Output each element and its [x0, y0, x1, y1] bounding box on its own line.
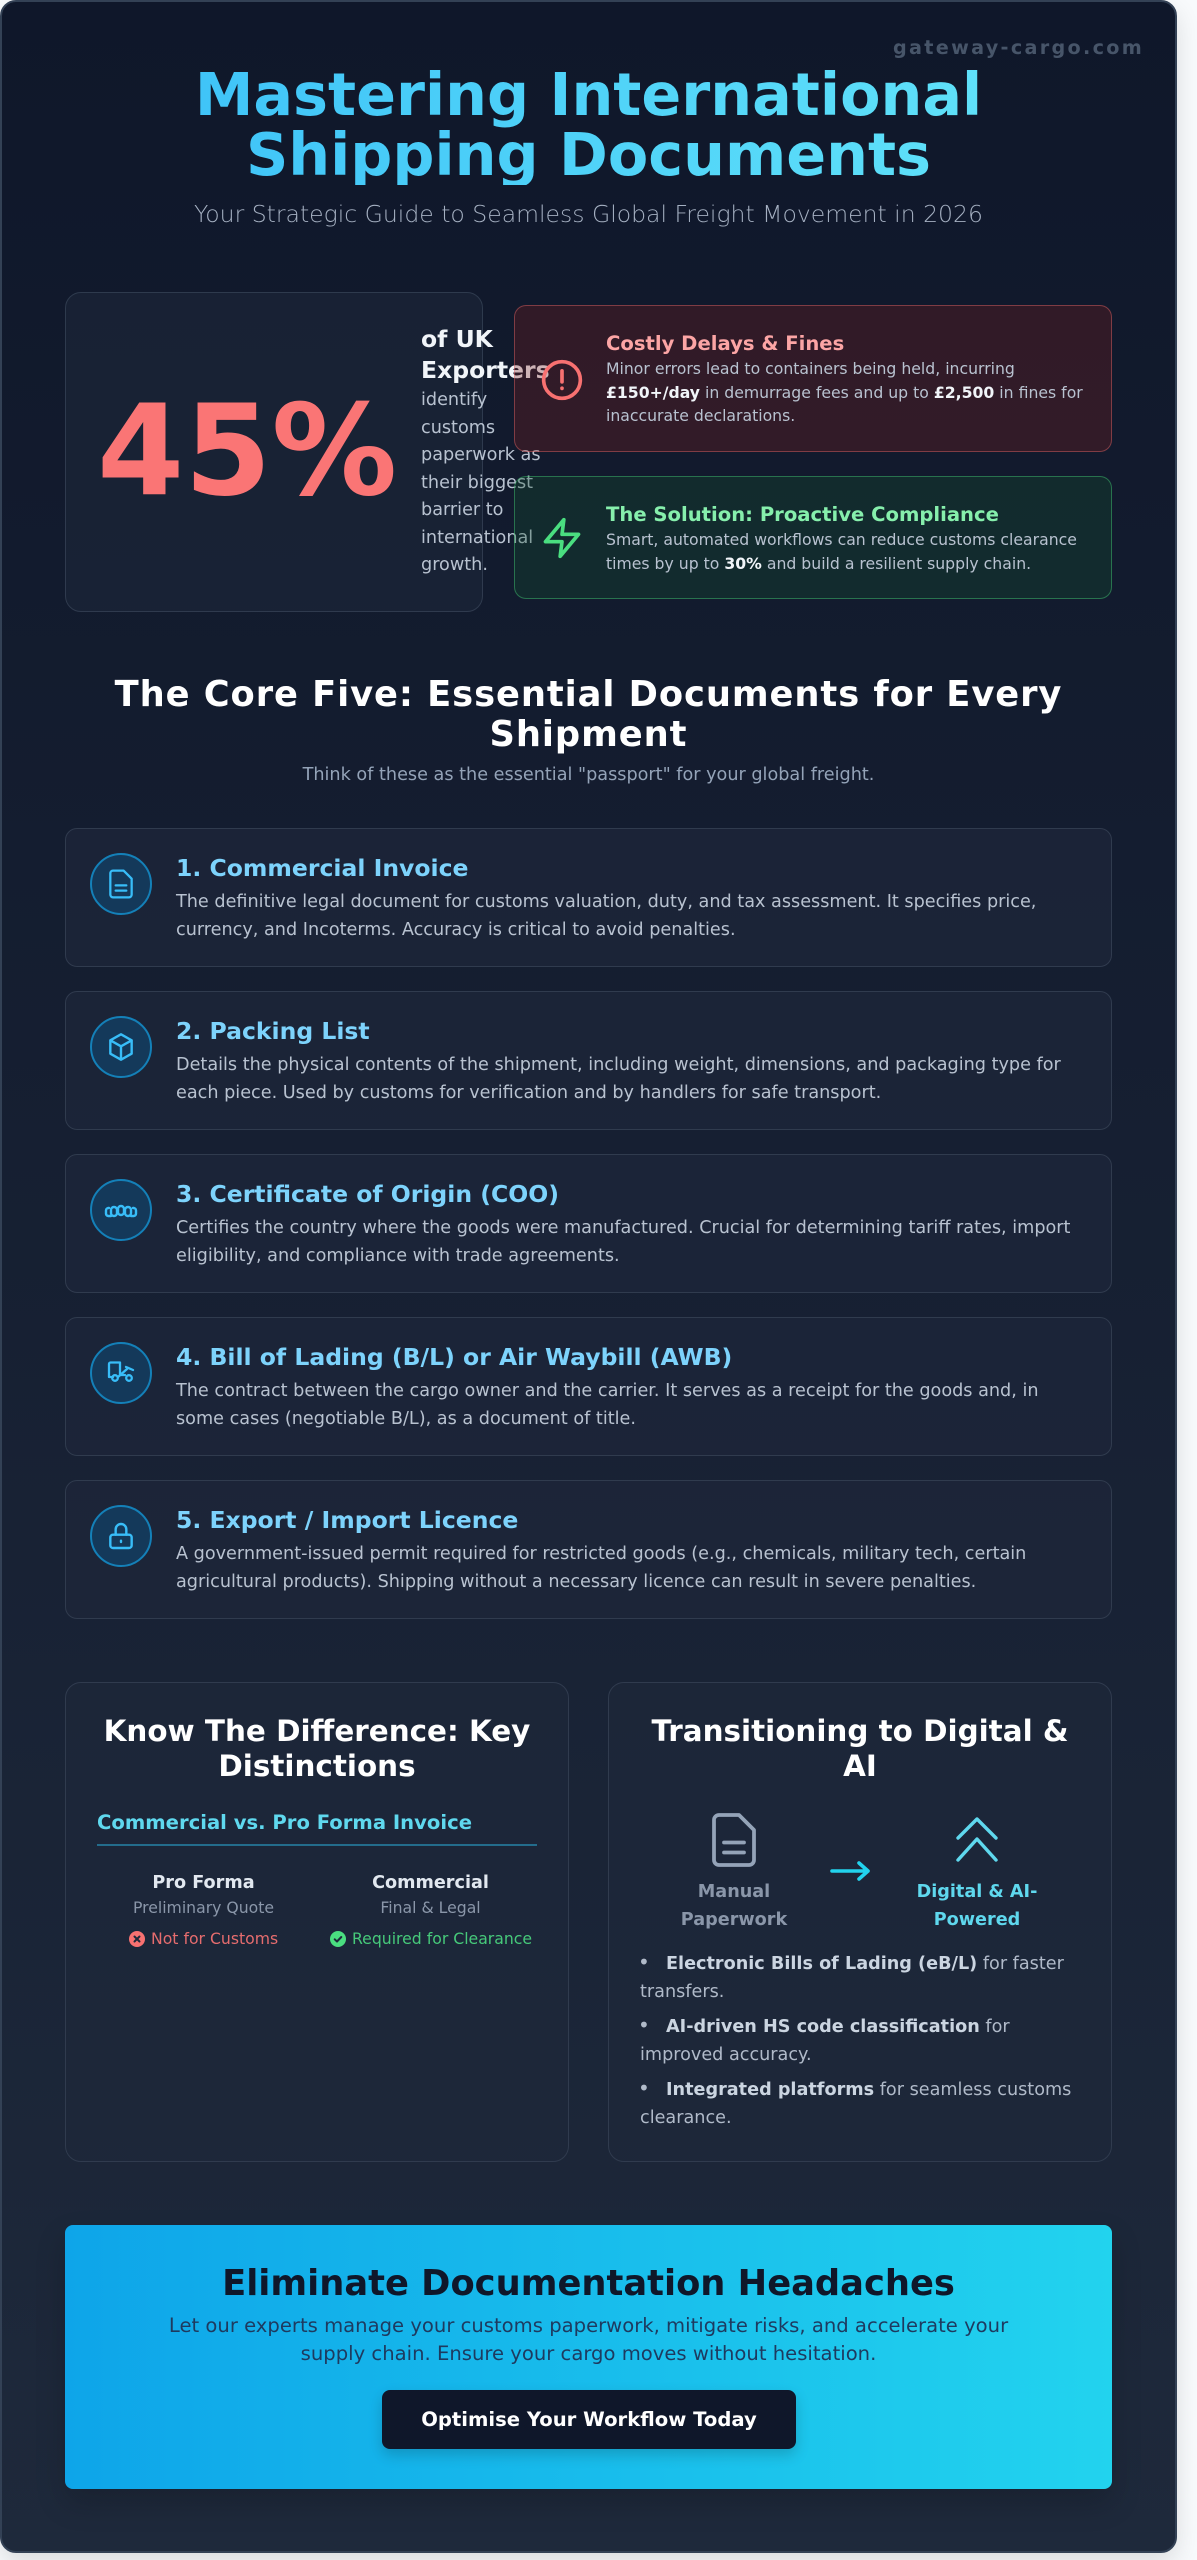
digital label: Digital & AI- [917, 1882, 1037, 1902]
icon: handshake chain [90, 1179, 152, 1241]
alert text: £150+/day in demurrage fees and up to £2,500 in fines for [606, 382, 1083, 402]
manual label: Paperwork [681, 1910, 787, 1930]
bullet three [638, 2076, 1071, 2128]
stat description: growth. [421, 555, 488, 575]
heading: 3. Certificate of Origin (COO) [176, 1180, 559, 1208]
commercial note: Final & Legal [380, 1898, 481, 1917]
panel heading: Distinctions [218, 1749, 416, 1783]
call to action panel [65, 2225, 1112, 2489]
description: A government-issued permit required for restricted goods (e.g., chemicals, military tech, certain [176, 1544, 1026, 1564]
solution heading: The Solution: Proactive Compliance [606, 503, 999, 526]
solution text: times by up to 30% and build a resilient supply chain. [606, 554, 1031, 572]
description: each piece. Used by customs for verification and by handlers for safe transport. [176, 1082, 881, 1102]
bullet three: clearance. [640, 2108, 732, 2128]
bullet list [638, 1950, 1071, 2128]
panel: solution [514, 476, 1112, 599]
bullet three: Integrated platforms for seamless customs [666, 2080, 1071, 2100]
title: Shipping Documents [246, 120, 931, 189]
stat description: international [421, 528, 533, 548]
CTA heading: Eliminate Documentation Headaches [222, 2263, 955, 2304]
status: required for clearance: Required for Clearance [352, 1929, 532, 1948]
divider line [97, 1844, 537, 1846]
panel heading: AI [843, 1749, 877, 1783]
CTA text: Let our experts manage your customs paperwork, mitigate risks, and accelerate your [169, 2314, 1008, 2337]
bullet one: Electronic Bills of Lading (eB/L) for faster [666, 1954, 1064, 1974]
panel: digital and AI [608, 1682, 1112, 2162]
description [176, 1381, 1039, 1428]
column: pro forma [129, 1873, 278, 1948]
stat heading: Exporters [421, 356, 550, 384]
pro forma note: Preliminary Quote [133, 1898, 274, 1917]
bullet one: • [638, 1950, 650, 1974]
description: The contract between the cargo owner and the carrier. It serves as a receipt for the goods and, in [176, 1381, 1039, 1401]
section subheading: Think of these as the essential "passport" for your global freight. [303, 765, 874, 785]
section heading [114, 674, 1062, 755]
icon: chevrons up [956, 1817, 998, 1862]
icon: truck [90, 1342, 152, 1404]
bullet two: • [638, 2013, 650, 2037]
panel: certificate of origin [65, 1154, 1112, 1293]
bullet one [638, 1950, 1064, 2002]
icon: paper document [712, 1813, 756, 1867]
panel: key distinctions [65, 1682, 569, 2162]
column: commercial [330, 1873, 532, 1948]
panel: packing list [65, 991, 1112, 1130]
description [176, 892, 1036, 940]
bullet two: improved accuracy. [640, 2044, 812, 2064]
CTA text: supply chain. Ensure your cargo moves without hesitation. [301, 2342, 876, 2364]
pro forma label: Pro Forma [152, 1873, 255, 1893]
stat description: their biggest [421, 472, 533, 492]
icon: alert [542, 360, 582, 400]
icon: document [90, 853, 152, 915]
stat description: paperwork as [421, 445, 541, 465]
CTA button: Optimise Your Workflow Today [421, 2408, 757, 2431]
CTA text [169, 2314, 1008, 2364]
description: eligibility, and compliance with trade agreements. [176, 1246, 620, 1266]
panel: costly delays [514, 305, 1112, 452]
bullet two: AI-driven HS code classification for [666, 2017, 1010, 2037]
stat heading [421, 325, 550, 384]
description: The definitive legal document for customs valuation, duty, and tax assessment. It specifies price, [176, 892, 1036, 912]
panel: export import licence [65, 1480, 1112, 1619]
alert text: Minor errors lead to containers being held, incurring [606, 359, 1015, 378]
icon: box [90, 1016, 152, 1078]
digital label [917, 1882, 1037, 1930]
CTA button [382, 2390, 796, 2449]
stat heading: of UK [421, 325, 493, 353]
manual label [681, 1882, 788, 1930]
description: agricultural products). Shipping without a necessary licence can result in severe penalties. [176, 1572, 976, 1592]
panel: 45 percent stat [65, 292, 483, 612]
heading: 2. Packing List [176, 1017, 370, 1045]
description [176, 1544, 1026, 1592]
stat description: barrier to [421, 500, 503, 520]
description: Certifies the country where the goods were manufactured. Crucial for determining tariff rates, import [176, 1218, 1070, 1238]
alert heading: Costly Delays & Fines [606, 332, 844, 355]
panel: commercial invoice [65, 828, 1112, 967]
big stat number: 45% [97, 378, 397, 524]
heading: 5. Export / Import Licence [176, 1506, 518, 1534]
commercial label: Commercial [372, 1873, 489, 1893]
stat description: identify [421, 390, 487, 410]
panel: bill of lading [65, 1317, 1112, 1456]
stat description [421, 390, 541, 575]
digital label: Powered [934, 1910, 1020, 1930]
description [176, 1055, 1061, 1102]
bullet one: transfers. [640, 1982, 724, 2002]
comparison title: Commercial vs. Pro Forma Invoice [97, 1811, 472, 1834]
manual label: Manual [698, 1882, 770, 1902]
panel heading: Know The Difference: Key [104, 1714, 530, 1748]
arrow [830, 1861, 870, 1881]
title: Mastering International [195, 60, 982, 129]
section heading: The Core Five: Essential Documents for Every [115, 674, 1062, 715]
title [0, 65, 1177, 185]
stat description: customs [421, 418, 495, 438]
description: some cases (negotiable B/L), as a document of title. [176, 1408, 636, 1428]
alert text [606, 359, 1083, 425]
solution text: Smart, automated workflows can reduce customs clearance [606, 530, 1077, 549]
panel heading [104, 1714, 530, 1783]
section heading: Shipment [490, 714, 687, 755]
icon: cross [129, 1931, 145, 1947]
icon: bolt [544, 518, 580, 558]
panel heading: Transitioning to Digital & [651, 1714, 1069, 1748]
description [176, 1218, 1070, 1266]
solution text [606, 530, 1077, 572]
bullet three: • [638, 2076, 650, 2100]
status: not for customs: Not for Customs [151, 1929, 278, 1948]
heading: 1. Commercial Invoice [176, 854, 468, 882]
watermark: gateway-cargo.com [893, 36, 1144, 59]
heading: 4. Bill of Lading (B/L) or Air Waybill (AWB) [176, 1343, 732, 1371]
icon: check [330, 1931, 346, 1947]
subtitle: Your Strategic Guide to Seamless Global Freight Movement in 2026 [194, 200, 983, 228]
description: currency, and Incoterms. Accuracy is critical to avoid penalties. [176, 920, 736, 940]
description: Details the physical contents of the shipment, including weight, dimensions, and packaging type for [176, 1055, 1061, 1075]
icon: lock [90, 1505, 152, 1567]
alert text: inaccurate declarations. [606, 406, 795, 425]
panel heading [651, 1714, 1069, 1783]
bullet two [638, 2013, 1010, 2064]
